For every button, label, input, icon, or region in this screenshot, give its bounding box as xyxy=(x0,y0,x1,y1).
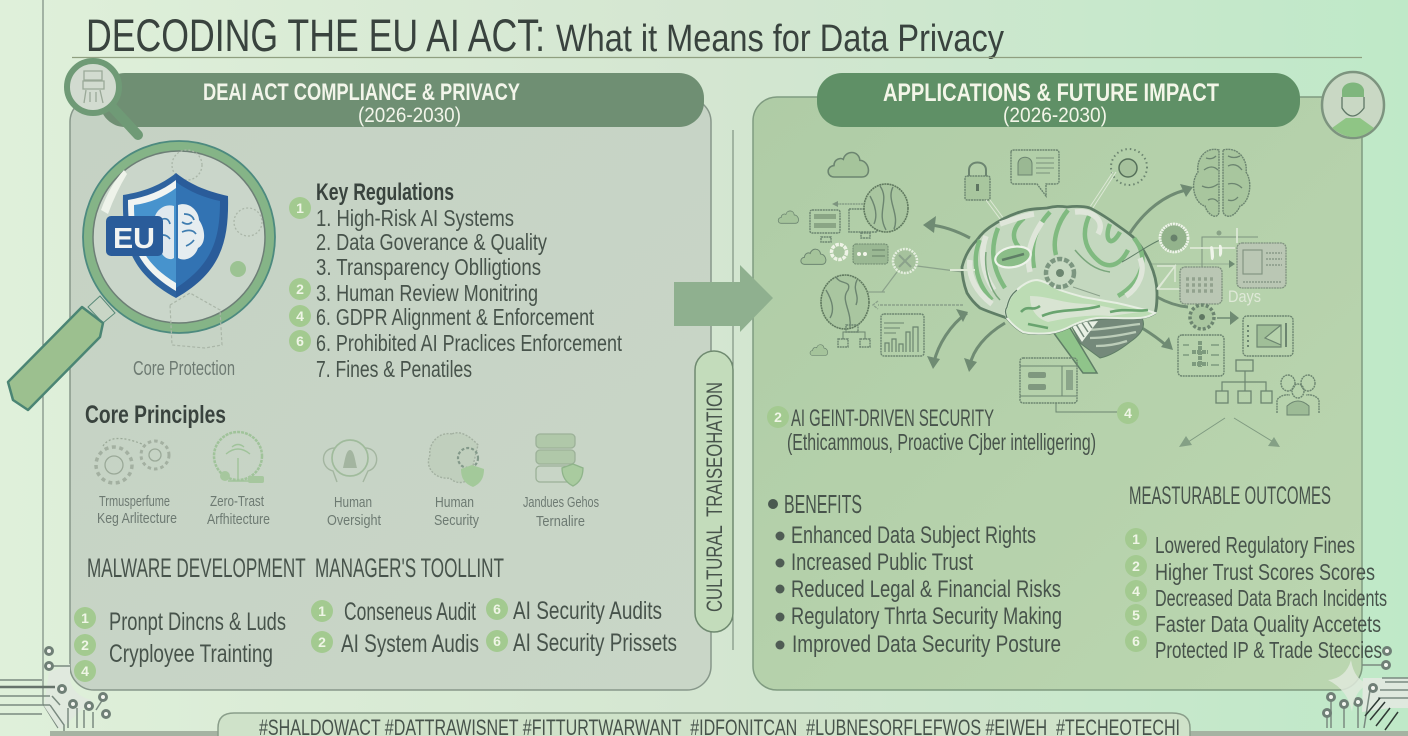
principle labels: Keg Arlitecture xyxy=(97,510,177,527)
decoration: circuit bottom left xyxy=(0,648,110,731)
list: toolkit column one: 2 xyxy=(81,637,89,653)
icon: padlock xyxy=(965,162,1024,246)
list: toolkit column one: 1 xyxy=(81,610,89,626)
icon: document panel xyxy=(1243,316,1293,356)
principle labels: Human xyxy=(334,494,372,511)
icon: gear lower right xyxy=(1190,305,1214,329)
list: toolkit column one: Cryployee Trainting xyxy=(109,640,273,668)
icon: chat document xyxy=(1011,150,1059,196)
decoration: circuit bottom right xyxy=(1324,648,1408,730)
list: measurable outcomes xyxy=(1125,482,1387,663)
icon: grey keypad card xyxy=(1180,267,1222,304)
icon: virus circle xyxy=(1068,149,1147,242)
list: measurable outcomes: 6 xyxy=(1132,633,1140,649)
list: toolkit column three: 6 xyxy=(493,633,501,649)
list: benefits: Regulatory Thrta Security Making xyxy=(791,603,1062,630)
principle labels: Security xyxy=(434,512,479,529)
list: benefits: Reduced Legal & Financial Risks xyxy=(791,576,1061,603)
list: benefits: Enhanced Data Subject Rights xyxy=(791,522,1036,549)
text: agent-driven security: AI GEINT-DRIVEN SECURITY xyxy=(791,405,994,432)
list: key regulations xyxy=(289,179,622,382)
list: measurable outcomes: 4 xyxy=(1132,583,1140,599)
list: toolkit column three: AI Security Audits xyxy=(513,597,662,625)
icon: human security xyxy=(428,433,484,487)
principle labels xyxy=(97,493,599,530)
icon: globe upper xyxy=(864,184,908,232)
list: toolkit column three: AI Security Prissets xyxy=(513,629,677,657)
panel header xyxy=(817,73,1300,127)
list: key regulations: 4 xyxy=(296,308,304,324)
line: brain to globe xyxy=(873,301,963,309)
list: key regulations: 6. GDPR Alignment & Enforcement xyxy=(316,304,594,330)
list: key regulations: 6. Prohibited AI Praclices Enforcement xyxy=(316,330,622,356)
bottom bands xyxy=(50,731,1408,736)
panel: compliance and privacy xyxy=(8,61,711,690)
list: benefits: Increased Public Trust xyxy=(791,549,973,576)
text: agent-driven security: (Ethicammous, Proactive Cjber intelligering) xyxy=(787,429,1096,455)
icon: zero trust xyxy=(214,432,264,483)
center divider line xyxy=(732,130,734,650)
list: key regulations: 1 xyxy=(296,200,304,216)
list: key regulations: 7. Fines & Penatiles xyxy=(316,356,472,382)
list: toolkit column one: 4 xyxy=(81,663,89,679)
list: toolkit column two: 2 xyxy=(318,634,326,650)
list: benefits xyxy=(768,489,1062,658)
principle labels: Oversight xyxy=(327,512,382,529)
icon: human oversight xyxy=(323,440,377,482)
list: key regulations: 3. Transparency Oblligtions xyxy=(316,254,541,280)
gyri xyxy=(976,210,1142,300)
panel header: (2026-2030) xyxy=(1003,104,1107,127)
cerebellum xyxy=(1070,317,1144,358)
label: days: Days xyxy=(1228,287,1261,306)
icon: clouds xyxy=(778,152,868,355)
list: toolkit column three xyxy=(486,597,677,657)
principle labels: Zero-Trast xyxy=(210,493,265,510)
icon: bar chart xyxy=(881,314,924,356)
vertical pill: cultural transformation: CULTURAL TRAISEOHATION xyxy=(702,382,727,612)
arrow: left to right xyxy=(674,265,773,332)
icon: globe lower xyxy=(821,275,869,329)
brain detail: gear xyxy=(1046,259,1074,287)
principle labels: Ternalire xyxy=(536,513,585,530)
list: benefits: BENEFITS xyxy=(784,489,862,519)
icon: grey document card xyxy=(1237,243,1286,288)
vertical pill: cultural transformation xyxy=(695,351,733,632)
icon: small org boxes xyxy=(838,325,870,347)
list: toolkit column two: AI System Audis xyxy=(341,630,479,658)
list: toolkit column two: 1 xyxy=(318,603,326,619)
icon: left small panels xyxy=(810,201,963,292)
icon: browser window xyxy=(1020,358,1117,412)
shield: EU xyxy=(113,223,155,255)
list: key regulations: 3. Human Review Monitring xyxy=(316,280,538,306)
list: toolkit column one xyxy=(74,607,286,682)
icon: dashed circle right xyxy=(1157,224,1258,289)
cerebrum xyxy=(962,206,1157,334)
text: agent-driven security xyxy=(767,405,1096,455)
temporal lobe xyxy=(1006,280,1155,334)
principle labels: Human xyxy=(435,494,474,511)
brain xyxy=(152,205,174,259)
icon: circuit card xyxy=(1178,335,1224,376)
icon: org chart xyxy=(1216,360,1272,403)
heading: toolkit: MALWARE DEVELOPMENT MANAGER'S TOOLLINT xyxy=(87,553,504,583)
panel header: APPLICATIONS & FUTURE IMPACT xyxy=(883,79,1219,107)
icon: database shield xyxy=(536,434,583,486)
list: benefits: Improved Data Security Posture xyxy=(792,631,1061,658)
badge: 4: 4 xyxy=(1124,405,1132,421)
caption: core protection: Core Protection xyxy=(133,358,235,380)
title: What it Means for Data Privacy xyxy=(556,18,1004,60)
list: key regulations: 2. Data Goverance & Quality xyxy=(316,229,547,255)
list: measurable outcomes: 2 xyxy=(1132,558,1140,574)
panel header xyxy=(100,73,704,127)
list: key regulations: 6 xyxy=(296,333,304,349)
text: agent-driven security: 2 xyxy=(774,409,782,425)
list: toolkit column three: 6 xyxy=(493,601,501,617)
icon: small magnifier xyxy=(67,61,138,135)
frame line left xyxy=(43,0,58,728)
list: measurable outcomes: 1 xyxy=(1132,531,1140,547)
arrows around brain xyxy=(923,184,1239,372)
list: toolkit column one: Pronpt Dincns & Luds xyxy=(109,608,286,636)
badge: 4 xyxy=(1117,402,1139,424)
shield xyxy=(106,173,228,298)
principle labels: Arfhitecture xyxy=(207,511,270,528)
icon: EU shield magnifier xyxy=(8,141,275,410)
icon: people xyxy=(1277,375,1319,415)
list: toolkit column two xyxy=(311,598,479,658)
brain stem xyxy=(1053,323,1097,373)
principle labels: Trmusperfume xyxy=(99,493,170,510)
principle labels: Jandues Gehos xyxy=(523,494,599,511)
list: toolkit column two: Conseneus Audit xyxy=(344,598,476,626)
title: DECODING THE EU AI ACT: xyxy=(86,10,545,61)
heading: core principles: Core Principles xyxy=(85,401,226,429)
icon: brain top right xyxy=(1194,149,1250,216)
list: measurable outcomes: 5 xyxy=(1132,607,1140,623)
title rule xyxy=(72,56,1362,58)
icon: gears xyxy=(96,438,169,483)
list: key regulations: 2 xyxy=(296,281,304,297)
panel: applications and future impact xyxy=(753,72,1387,690)
icon: central brain xyxy=(950,206,1160,373)
icon: avatar xyxy=(1322,72,1384,138)
panel header: DEAI ACT COMPLIANCE & PRIVACY xyxy=(203,79,520,106)
title xyxy=(86,10,1004,61)
arrows: split xyxy=(1179,418,1280,447)
list: key regulations: Key Regulations xyxy=(316,179,454,206)
icon: sparkle xyxy=(1328,660,1369,712)
list: key regulations: 1. High-Risk AI Systems xyxy=(316,205,514,231)
panel header: (2026-2030) xyxy=(358,104,461,127)
